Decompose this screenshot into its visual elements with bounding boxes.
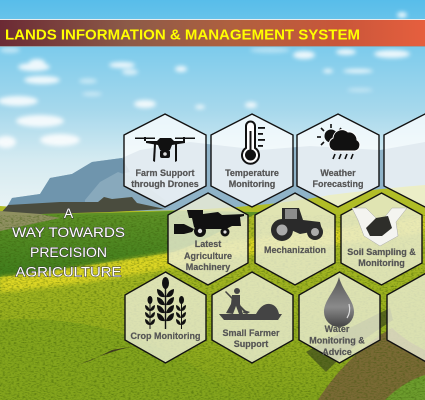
hexagon: latest agriculture machinery xyxy=(168,193,248,285)
upper dark green field xyxy=(0,211,260,277)
hexagon: latest agriculture machinery: Agriculture xyxy=(184,251,232,261)
label: Farm Support xyxy=(135,168,195,178)
label: Crop Monitoring xyxy=(131,331,200,341)
hexagon: crop monitoring xyxy=(125,272,206,363)
label: Weather xyxy=(320,168,356,178)
hexagon: weather forecasting: Forecasting xyxy=(312,179,364,189)
hexagon: partial row 3 right xyxy=(387,272,425,363)
hexagon: soil sampling and monitoring: Monitoring xyxy=(358,258,405,268)
icon: wheat stalks xyxy=(145,277,186,329)
icon: combine harvester xyxy=(174,210,244,237)
hexagon: water monitoring and advice: Monitoring & xyxy=(309,336,365,346)
left slogan xyxy=(12,205,125,280)
hexagon: small farmer support: Support xyxy=(234,339,268,349)
hexagon: farm support through drones: through Drones xyxy=(131,179,199,189)
label: Latest xyxy=(195,239,221,249)
hexagon: water monitoring and advice: Advice xyxy=(322,347,352,357)
brown strip xyxy=(0,211,60,231)
field base xyxy=(0,185,425,400)
icon: water drop xyxy=(324,277,354,327)
mountains xyxy=(8,142,425,215)
label: Soil Sampling & xyxy=(347,247,416,257)
hexagon: weather forecasting xyxy=(297,114,379,207)
hexagon: partial row 1 right xyxy=(384,114,425,207)
icon: hands holding soil xyxy=(352,208,407,246)
left slogan: PRECISION xyxy=(30,244,107,260)
hexagon: mechanization xyxy=(255,193,335,285)
title banner xyxy=(0,19,425,47)
label: Mechanization xyxy=(264,245,326,255)
label: Water xyxy=(325,324,350,334)
icon: thermometer xyxy=(242,122,265,164)
icon: drone xyxy=(135,137,195,162)
icon: tractor xyxy=(271,208,323,241)
icon: farmer shovelling soil xyxy=(219,288,282,320)
left slogan: WAY TOWARDS xyxy=(12,224,125,240)
left slogan: A xyxy=(64,205,74,221)
bright yellow crop band xyxy=(0,216,425,292)
tree line xyxy=(0,197,165,214)
title text: LANDS INFORMATION & MANAGEMENT SYSTEM xyxy=(5,28,360,44)
left slogan: AGRICULTURE xyxy=(16,264,122,280)
sky background xyxy=(0,0,425,220)
icon: sun cloud rain xyxy=(317,124,360,159)
hexagon: soil sampling and monitoring xyxy=(341,193,422,285)
label: Temperature xyxy=(225,168,279,178)
hexagon: small farmer support xyxy=(212,272,293,363)
lower darker field xyxy=(0,319,240,400)
field texture xyxy=(0,215,425,400)
hexagon: temperature monitoring: Monitoring xyxy=(229,179,275,189)
hexagon: latest agriculture machinery: Machinery xyxy=(186,262,230,272)
hexagon: farm support through drones xyxy=(124,114,206,207)
clouds xyxy=(0,12,410,148)
field ruts xyxy=(78,346,135,365)
hexagon: water monitoring and advice xyxy=(299,272,380,363)
hexagon: temperature monitoring xyxy=(211,114,293,207)
label: Small Farmer xyxy=(222,328,280,338)
brown hill xyxy=(318,328,425,400)
